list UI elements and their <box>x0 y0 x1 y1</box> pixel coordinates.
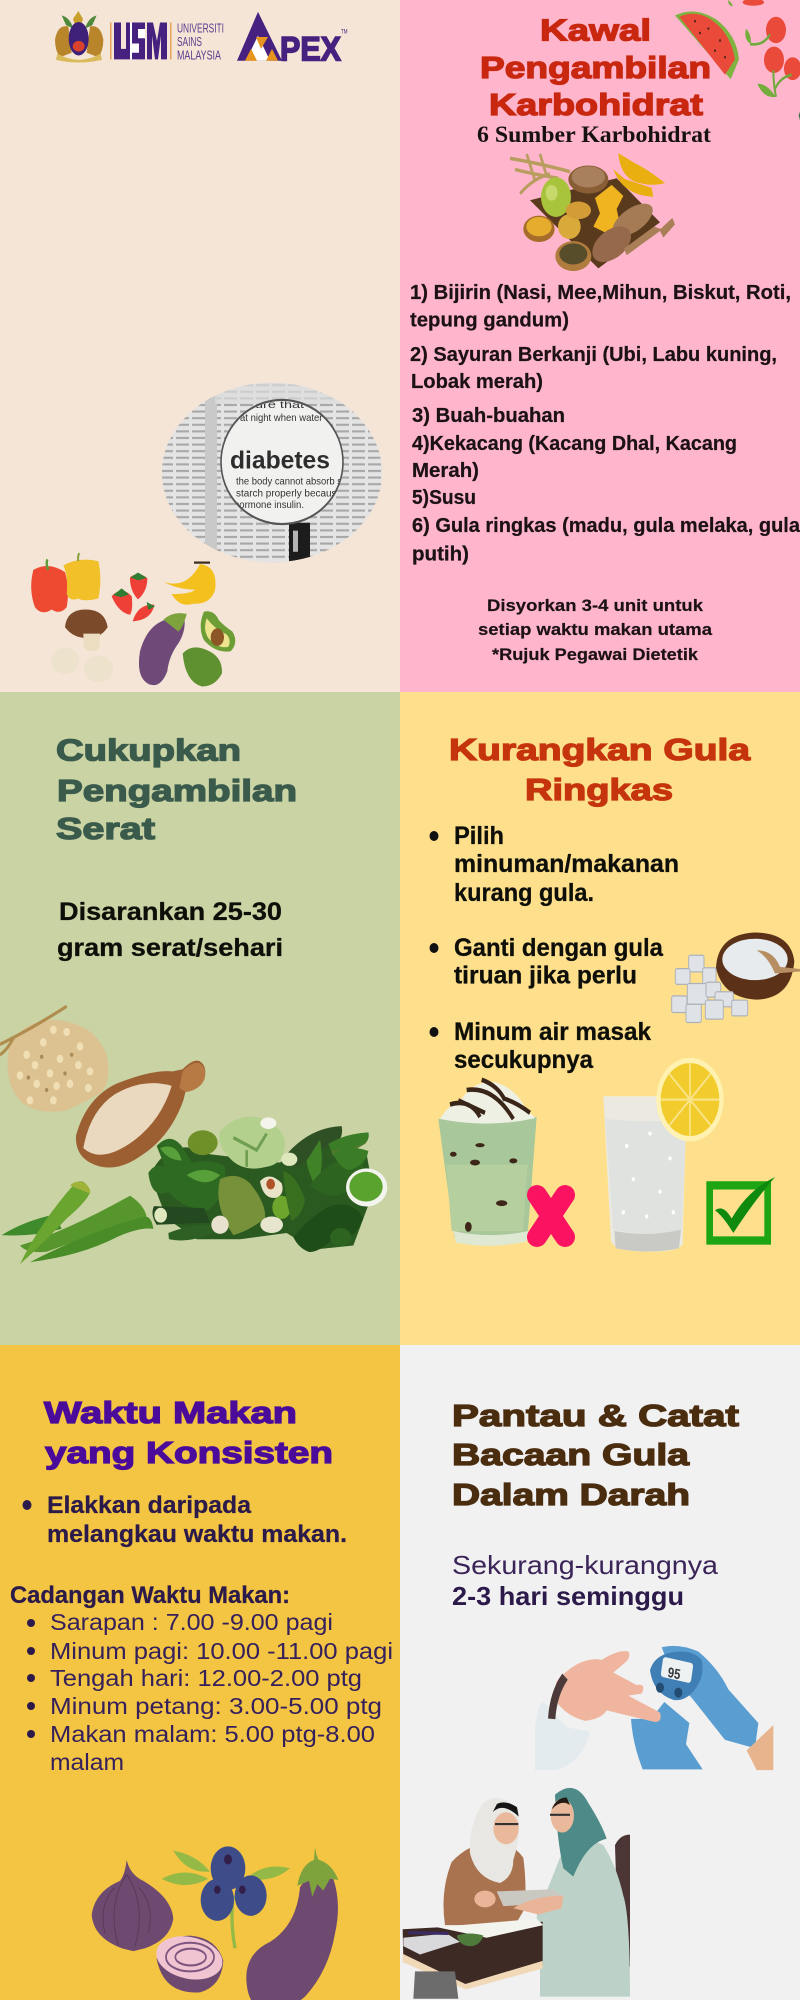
illustration: purple foods <box>92 1846 338 2000</box>
list: suggested meal times: malam <box>50 1749 124 1775</box>
icon: red cross <box>537 1195 565 1237</box>
logo: APEX: TM <box>341 29 347 36</box>
heading: Pantau & Catat <box>452 1398 739 1433</box>
image: glass of water with lemon <box>603 1058 724 1252</box>
text: recommended fibre <box>57 898 283 962</box>
list: suggested meal times: Makan malam: 5.00 ptg-8.00 <box>50 1721 375 1747</box>
list: suggested meal times: Minum petang: 3.00-5.00 ptg <box>50 1693 382 1719</box>
icon: watermelon and cherries <box>675 0 800 121</box>
heading: Cukupkan <box>56 732 241 768</box>
logo: USM wordmark <box>110 22 172 59</box>
text: avoid skipping meals: melangkau waktu makan. <box>47 1521 347 1548</box>
list: six carbohydrate sources: tepung gandum) <box>410 308 569 332</box>
logo: APEX <box>237 12 347 69</box>
note: recommended units: *Rujuk Pegawai Dietetik <box>492 645 699 664</box>
image: sweet green drink <box>438 1080 537 1246</box>
list: six carbohydrate sources: putih) <box>412 542 469 566</box>
icon: green checkbox with tick <box>710 1177 775 1241</box>
image: wooden scoop of grains <box>76 1061 205 1168</box>
list: suggested meal times: Sarapan : 7.00 -9.00 pagi <box>50 1609 333 1635</box>
list: six carbohydrate sources: 6) Gula ringkas (madu, gula melaka, gula <box>412 514 800 537</box>
image: dietitian consultation <box>403 1788 630 1999</box>
text: frequency <box>452 1550 719 1611</box>
heading: Pengambilan <box>57 773 297 808</box>
panel: intro with logos and diabetes image <box>0 0 400 692</box>
text: recommended fibre: gram serat/sehari <box>57 934 283 962</box>
image: diabetes under magnifying glass <box>162 383 385 562</box>
heading: Bacaan Gula <box>452 1437 690 1472</box>
logo: Universiti Sains Malaysia <box>177 22 224 63</box>
text: frequency: 2-3 hari seminggu <box>452 1581 684 1611</box>
panel: Waktu Makan yang Konsisten <box>0 1345 400 2000</box>
image: diabetes under magnifying glass: ure that for <box>255 399 325 410</box>
list: six carbohydrate sources: 4)Kekacang (Kacang Dhal, Kacang <box>412 432 737 455</box>
icons: fruit and vegetables <box>31 553 235 686</box>
list: six carbohydrate sources: Merah) <box>412 459 479 482</box>
list: six carbohydrate sources: 1) Bijirin (Nasi, Mee,Mihun, Biskut, Roti, <box>410 281 791 304</box>
heading <box>449 732 751 807</box>
note: recommended units: Disyorkan 3-4 unit untuk <box>487 596 704 615</box>
subtitle: 6 Sumber Karbohidrat <box>477 122 711 147</box>
image: diabetes under magnifying glass: hormone insulin. <box>234 499 304 510</box>
list: six carbohydrate sources: 2) Sayuran Berkanji (Ubi, Labu kuning, <box>410 343 777 366</box>
panel: Cukupkan Pengambilan Serat <box>0 692 400 1345</box>
image: diabetes under magnifying glass: the body cannot absorb s <box>236 475 343 487</box>
list: suggested meal times: Cadangan Waktu Makan: <box>10 1582 290 1609</box>
list: sugar advice <box>430 822 679 1074</box>
list: suggested meal times <box>10 1582 393 1775</box>
image: diabetes under magnifying glass: starch properly because <box>236 487 342 499</box>
logo: Universiti Sains Malaysia: MALAYSIA <box>177 49 221 63</box>
logo: APEX: PEX <box>280 30 342 69</box>
heading <box>452 1398 739 1512</box>
text: avoid skipping meals: Elakkan daripada <box>47 1492 252 1519</box>
list: sugar advice: tiruan jika perlu <box>454 962 637 990</box>
panel: Kurangkan Gula Ringkas <box>400 692 800 1345</box>
list: six carbohydrate sources: 3) Buah-buahan <box>412 404 565 427</box>
note: recommended units <box>478 596 713 664</box>
text: avoid skipping meals <box>22 1492 347 1548</box>
list: six carbohydrate sources: Lobak merah) <box>411 370 543 393</box>
heading <box>56 732 297 846</box>
list: sugar advice: secukupnya <box>454 1046 594 1074</box>
panel: Pantau dan Catat <box>400 1345 800 2000</box>
list: sugar advice: Minum air masak <box>454 1018 651 1046</box>
image: green vegetables <box>148 1117 387 1252</box>
list: sugar advice: minuman/makanan <box>454 850 679 878</box>
image: carbohydrate foods <box>510 153 675 271</box>
list: suggested meal times: Minum pagi: 10.00 -11.00 pagi <box>50 1638 393 1664</box>
logo: university crest <box>55 11 103 62</box>
panel: Kawal Pengambilan Karbohidrat <box>400 0 800 692</box>
list: six carbohydrate sources: 5)Susu <box>412 486 476 509</box>
image: blood glucose test: 95 <box>667 1664 681 1683</box>
list: sugar advice: Pilih <box>454 822 504 850</box>
heading: Dalam Darah <box>452 1477 690 1512</box>
list: suggested meal times: Tengah hari: 12.00-2.00 ptg <box>50 1665 362 1691</box>
title: Kawal <box>540 12 651 48</box>
heading: yang Konsisten <box>45 1435 333 1470</box>
title <box>480 12 711 122</box>
image: diabetes under magnifying glass: at night when water w <box>240 412 332 423</box>
image: okra <box>2 1181 153 1264</box>
image: oats pile <box>0 1006 108 1112</box>
text: recommended fibre: Disarankan 25-30 <box>59 898 282 926</box>
image: sugar bowl and cubes <box>672 933 800 1022</box>
heading: Waktu Makan <box>44 1395 297 1430</box>
list: sugar advice: kurang gula. <box>454 879 594 907</box>
heading: Kurangkan Gula <box>449 732 751 767</box>
list: six carbohydrate sources <box>410 281 800 566</box>
image: blood glucose test <box>535 1646 773 1770</box>
title: Pengambilan <box>480 50 711 85</box>
heading <box>44 1395 333 1470</box>
image: diabetes under magnifying glass: diabetes <box>230 446 330 474</box>
title: Karbohidrat <box>489 87 703 122</box>
logo: Universiti Sains Malaysia: UNIVERSITI <box>177 22 224 36</box>
heading: Serat <box>56 811 155 846</box>
logo: Universiti Sains Malaysia: SAINS <box>177 36 202 50</box>
list: sugar advice: Ganti dengan gula <box>454 934 664 962</box>
note: recommended units: setiap waktu makan utama <box>478 620 713 639</box>
text: frequency: Sekurang-kurangnya <box>452 1550 719 1580</box>
heading: Ringkas <box>525 772 673 807</box>
